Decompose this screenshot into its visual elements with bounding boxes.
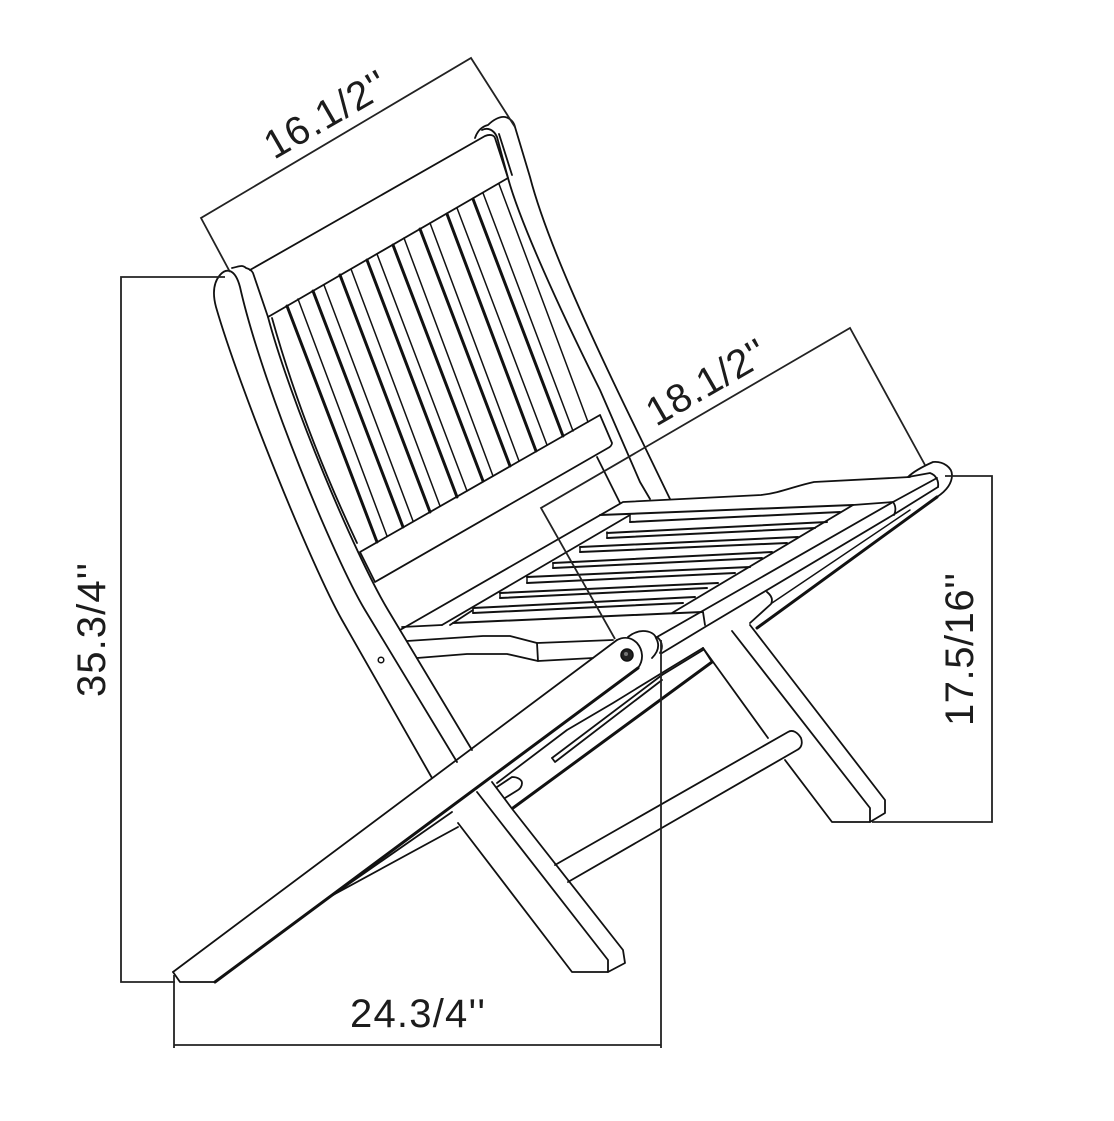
seat slats bbox=[473, 505, 853, 613]
dimension: total depth: 24.3/4'' bbox=[350, 992, 485, 1036]
crossbar bbox=[555, 731, 802, 882]
left back post bbox=[214, 266, 472, 778]
seat support rail with slot bbox=[333, 497, 937, 895]
rear leg bbox=[703, 625, 885, 822]
front leg bar bbox=[173, 631, 662, 982]
chair line drawing bbox=[173, 117, 952, 982]
dimension: seat height bbox=[872, 476, 992, 822]
pivot bolt bbox=[621, 649, 633, 661]
dimension: back width bbox=[201, 58, 515, 272]
dimension: back width: 16.1/2'' bbox=[256, 62, 395, 168]
dimension: seat depth: 18.1/2'' bbox=[638, 331, 775, 435]
dimension: total depth bbox=[174, 640, 661, 1048]
seat frame bbox=[400, 462, 952, 661]
lower left leg bbox=[458, 782, 625, 972]
dimension: seat depth bbox=[541, 328, 925, 639]
dimension: total height: 35.3/4'' bbox=[70, 563, 114, 697]
dimension: total height bbox=[70, 277, 225, 982]
seat hole bbox=[378, 657, 384, 663]
back slats bbox=[287, 184, 588, 542]
lower back rail bbox=[360, 415, 612, 582]
top back rail bbox=[250, 135, 508, 317]
right back post bbox=[475, 117, 670, 503]
dimension: seat height: 17.5/16'' bbox=[938, 573, 982, 726]
